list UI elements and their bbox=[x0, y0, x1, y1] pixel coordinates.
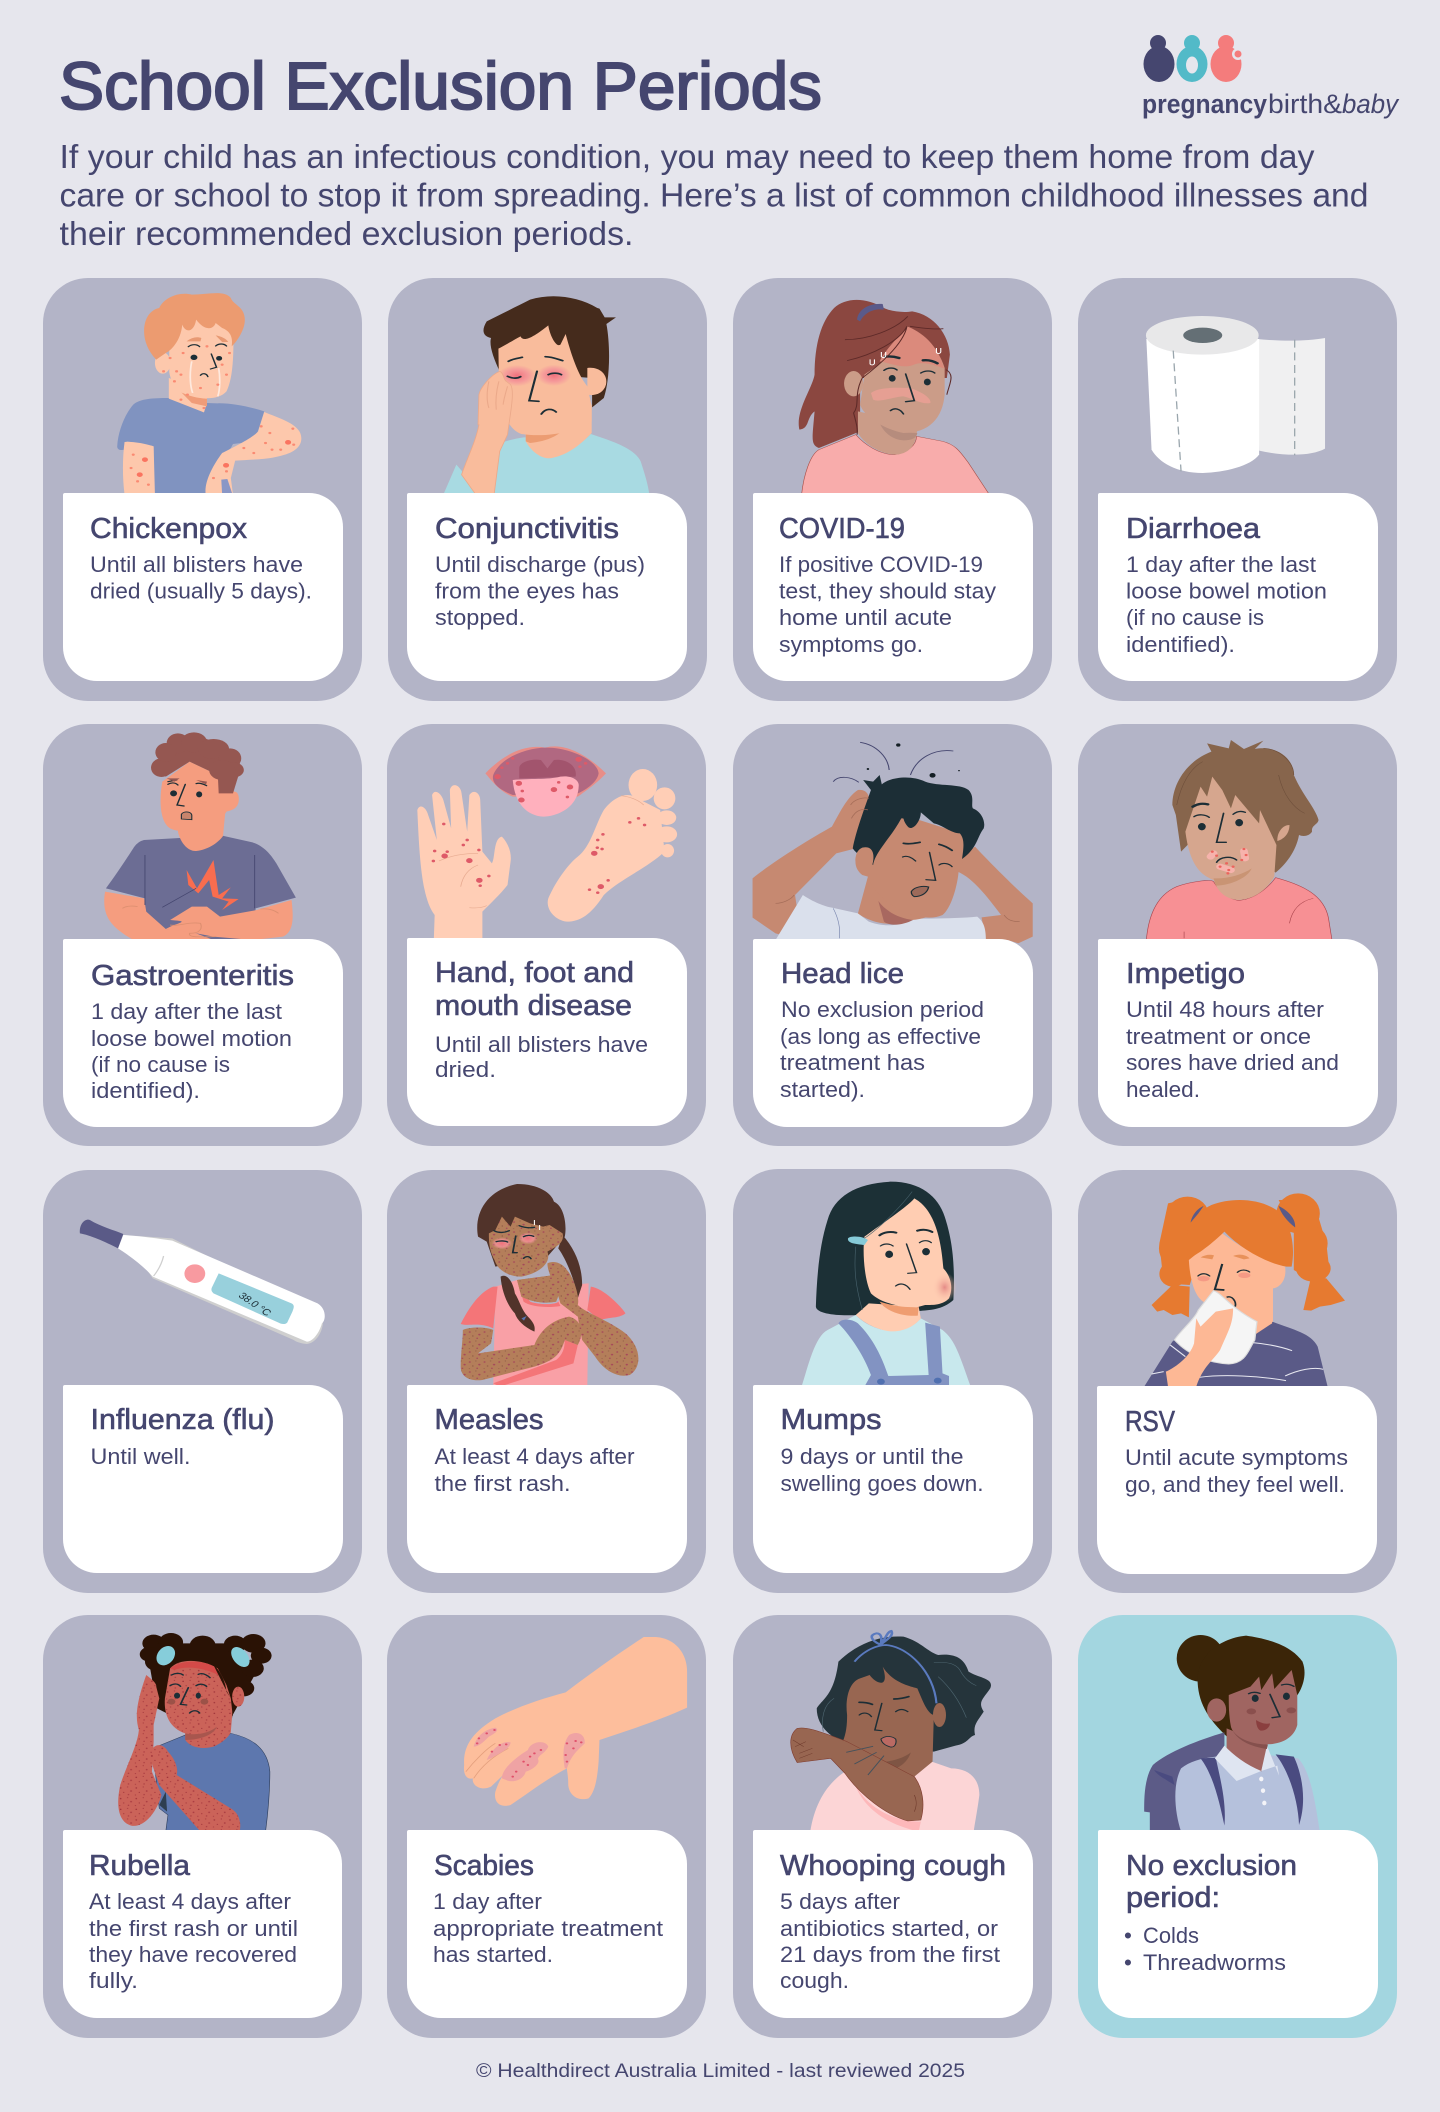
panel: whooping cough bbox=[733, 1615, 1052, 2038]
text card: whooping cough: Whooping cough bbox=[780, 1850, 1006, 1882]
illustration: girl coughing into elbow bbox=[791, 1631, 991, 1832]
text card: mumps bbox=[753, 1385, 1033, 1573]
intro text: If your child has an infectious condition, you may need to keep them home from day bbox=[60, 138, 1315, 175]
text card: hand, foot and mouth disease bbox=[407, 938, 687, 1126]
logo: pregnancy birth and baby bbox=[1142, 35, 1399, 119]
text card: hand, foot and mouth disease: dried. bbox=[435, 1057, 496, 1082]
intro text: care or school to stop it from spreading. Here’s a list of common childhood illnesses and bbox=[60, 176, 1369, 214]
panel: conjunctivitis bbox=[388, 278, 707, 701]
panel: scabies bbox=[387, 1615, 706, 2038]
intro text: their recommended exclusion periods. bbox=[60, 215, 634, 252]
panel: hand, foot and mouth disease bbox=[387, 724, 706, 1146]
text card: hand, foot and mouth disease: mouth disease bbox=[435, 990, 632, 1022]
text card: rubella: Rubella bbox=[89, 1850, 190, 1882]
text card: head lice bbox=[753, 939, 1033, 1127]
text card: impetigo: Impetigo bbox=[1126, 958, 1245, 990]
text card: chickenpox: Until all blisters have bbox=[90, 552, 303, 577]
illustration: toilet paper roll bbox=[1146, 316, 1325, 473]
text card: gastroenteritis: (if no cause is bbox=[91, 1052, 230, 1077]
text card: impetigo: healed. bbox=[1126, 1077, 1200, 1102]
text card: hand, foot and mouth disease: Until all blisters have bbox=[435, 1032, 648, 1057]
text card: scabies: has started. bbox=[433, 1942, 553, 1967]
text card: impetigo: Until 48 hours after bbox=[1126, 997, 1325, 1022]
text card: rsv: RSV bbox=[1125, 1406, 1175, 1438]
text card: measles: the first rash. bbox=[434, 1471, 570, 1496]
text card: mumps: 9 days or until the bbox=[780, 1444, 964, 1469]
text card: diarrhoea: Diarrhoea bbox=[1126, 513, 1260, 545]
intro text bbox=[60, 138, 1369, 252]
text card: rubella: At least 4 days after bbox=[89, 1889, 292, 1914]
text card: diarrhoea: identified). bbox=[1126, 632, 1235, 657]
text card: conjunctivitis: Until discharge (pus) bbox=[435, 552, 645, 577]
illustration: girl with rubella rash bbox=[118, 1633, 272, 1832]
text card: impetigo: treatment or once bbox=[1126, 1024, 1311, 1049]
text card: no exclusion period: period: bbox=[1126, 1882, 1220, 1914]
text card: influenza: Influenza (flu) bbox=[90, 1404, 274, 1436]
illustration: hand with scabies bbox=[464, 1637, 687, 1806]
text card: gastroenteritis: 1 day after the last bbox=[91, 999, 283, 1024]
text card: gastroenteritis: Gastroenteritis bbox=[91, 960, 294, 992]
text card: rsv bbox=[1097, 1386, 1377, 1574]
illustration: girl blowing nose bbox=[1144, 1193, 1345, 1387]
text card: gastroenteritis: loose bowel motion bbox=[91, 1026, 292, 1051]
text card: chickenpox: dried (usually 5 days). bbox=[90, 578, 312, 604]
text card: covid-19: home until acute bbox=[779, 605, 952, 630]
illustration: healthy child with backpack bbox=[1144, 1635, 1320, 1832]
panel: gastroenteritis bbox=[43, 724, 362, 1146]
text card: head lice: (as long as effective bbox=[780, 1024, 981, 1049]
text card: measles: Measles bbox=[434, 1404, 544, 1436]
text card: whooping cough: 21 days from the first bbox=[780, 1942, 1001, 1967]
panel: head lice bbox=[733, 724, 1052, 1146]
text card: gastroenteritis: identified). bbox=[91, 1078, 200, 1103]
illustration: boy scratching head bbox=[753, 742, 1033, 943]
panel: covid-19 bbox=[733, 278, 1052, 701]
text card: diarrhoea: (if no cause is bbox=[1126, 605, 1264, 630]
text card: covid-19 bbox=[753, 493, 1033, 681]
text card: diarrhoea: loose bowel motion bbox=[1126, 578, 1327, 604]
illustration: boy holding stomach bbox=[104, 732, 296, 940]
text card: measles: At least 4 days after bbox=[434, 1444, 635, 1469]
text card: covid-19: COVID-19 bbox=[779, 513, 905, 545]
footer: © Healthdirect Australia Limited - last reviewed 2025 bbox=[476, 2060, 965, 2082]
text card: scabies: 1 day after bbox=[433, 1889, 543, 1914]
text card: scabies: appropriate treatment bbox=[433, 1916, 664, 1941]
text card: influenza bbox=[63, 1385, 343, 1573]
text card: influenza: Until well. bbox=[90, 1444, 190, 1469]
logo: pregnancy birth and baby: baby bbox=[1342, 89, 1399, 119]
panel: mumps bbox=[733, 1169, 1052, 1593]
text card: scabies: Scabies bbox=[434, 1850, 534, 1882]
text card: head lice: treatment has bbox=[780, 1050, 925, 1075]
text card: impetigo bbox=[1098, 939, 1378, 1127]
text card: no exclusion period: No exclusion bbox=[1126, 1850, 1297, 1882]
panel: chickenpox bbox=[43, 278, 362, 701]
illustration: girl with swollen cheek bbox=[802, 1182, 971, 1387]
text card: mumps: Mumps bbox=[780, 1404, 882, 1436]
text card: rsv: go, and they feel well. bbox=[1125, 1472, 1345, 1497]
text card: no exclusion period: Colds bbox=[1143, 1923, 1199, 1948]
panel: measles bbox=[387, 1170, 706, 1593]
illustration: mouth, hand and foot with blisters bbox=[417, 746, 677, 940]
panel: diarrhoea bbox=[1078, 278, 1397, 701]
text card: head lice: started). bbox=[780, 1077, 865, 1102]
text card: whooping cough: antibiotics started, or bbox=[780, 1916, 999, 1941]
text card: head lice: Head lice bbox=[781, 958, 904, 990]
text card: conjunctivitis: stopped. bbox=[435, 605, 525, 630]
illustration: thermometer: 38.0 °C bbox=[236, 1291, 273, 1319]
panel: no exclusion period bbox=[1078, 1615, 1397, 2038]
text card: no exclusion period: • bbox=[1124, 1923, 1132, 1948]
text card: diarrhoea: 1 day after the last bbox=[1126, 552, 1317, 577]
illustration: girl with measles rash bbox=[461, 1184, 638, 1387]
text card: gastroenteritis bbox=[63, 939, 343, 1127]
text card: conjunctivitis bbox=[407, 493, 687, 681]
text card: no exclusion period bbox=[1098, 1830, 1378, 2018]
logo: pregnancy birth and baby: pregnancy bbox=[1142, 89, 1267, 119]
text card: conjunctivitis: Conjunctivitis bbox=[435, 513, 619, 545]
text card: hand, foot and mouth disease: Hand, foot and bbox=[435, 957, 634, 989]
text card: no exclusion period: • bbox=[1124, 1950, 1132, 1975]
illustration: girl with fever bbox=[799, 300, 989, 495]
text card: whooping cough: 5 days after bbox=[780, 1889, 901, 1914]
text card: rubella: fully. bbox=[89, 1968, 138, 1993]
text card: measles bbox=[407, 1385, 687, 1573]
panel: rubella bbox=[43, 1615, 362, 2038]
text card: whooping cough: cough. bbox=[780, 1968, 849, 1993]
text card: no exclusion period: Threadworms bbox=[1143, 1950, 1286, 1975]
panel: rsv bbox=[1078, 1170, 1397, 1593]
text card: rubella: the first rash or until bbox=[89, 1916, 298, 1941]
panel: impetigo bbox=[1078, 724, 1397, 1146]
panel: influenza bbox=[43, 1170, 362, 1593]
text card: conjunctivitis: from the eyes has bbox=[435, 578, 619, 604]
text card: head lice: No exclusion period bbox=[781, 997, 984, 1022]
illustration: boy with chickenpox bbox=[117, 293, 301, 495]
text card: covid-19: test, they should stay bbox=[779, 578, 997, 604]
illustration: boy with sore red eyes bbox=[443, 296, 649, 495]
text card: covid-19: symptoms go. bbox=[779, 632, 923, 657]
text card: diarrhoea bbox=[1098, 493, 1378, 681]
text card: chickenpox bbox=[63, 493, 343, 681]
title: School Exclusion Periods bbox=[59, 49, 822, 124]
illustration: thermometer bbox=[80, 1220, 325, 1344]
text card: impetigo: sores have dried and bbox=[1126, 1050, 1339, 1075]
logo: pregnancy birth and baby: birth& bbox=[1268, 89, 1342, 119]
text card: rubella bbox=[63, 1830, 342, 2018]
text card: scabies bbox=[407, 1830, 687, 2018]
text card: whooping cough bbox=[753, 1830, 1033, 2018]
text card: covid-19: If positive COVID-19 bbox=[779, 552, 983, 577]
illustration: child with mouth sores bbox=[1146, 740, 1332, 940]
text card: rsv: Until acute symptoms bbox=[1125, 1445, 1348, 1470]
text card: mumps: swelling goes down. bbox=[780, 1471, 984, 1496]
text card: rubella: they have recovered bbox=[89, 1942, 297, 1967]
text card: chickenpox: Chickenpox bbox=[90, 513, 247, 545]
